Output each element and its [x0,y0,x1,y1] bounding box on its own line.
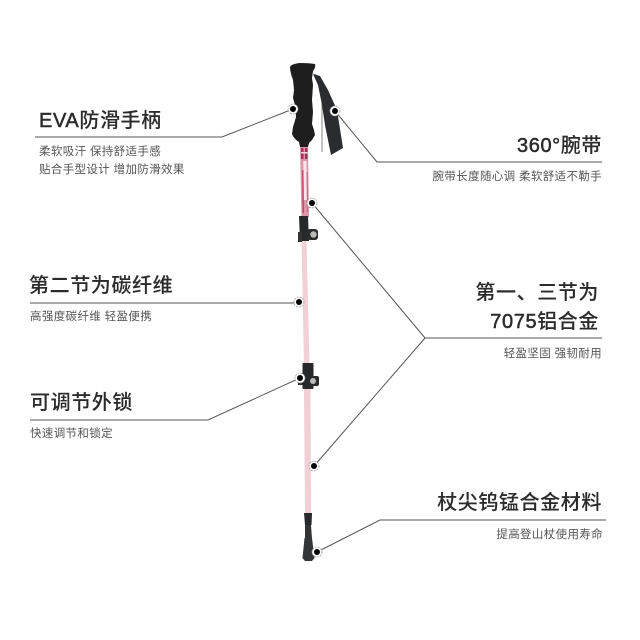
leader line [317,520,606,552]
marker [312,547,322,557]
leader line [35,109,293,137]
description: 轻盈坚固 强韧耐用 [504,346,602,360]
description [39,144,185,176]
marker [288,104,298,114]
description: 柔软吸汗 保持舒适手感 [39,144,161,158]
leader line [30,378,300,420]
description: 高强度碳纤维 轻盈便携 [30,309,152,323]
callout: EVA grip [35,104,298,176]
pole tip [302,513,314,561]
heading: 杖尖钨锰合金材料 [437,491,602,514]
marker lower [309,461,319,471]
heading: EVA防滑手柄 [39,109,162,132]
pole brand graphics [301,148,308,213]
marker [330,106,340,116]
marker [295,373,305,383]
trekking pole [290,63,343,561]
heading: 第二节为碳纤维 [29,274,173,297]
upper clamp [298,216,318,242]
heading: 第一、三节为 [475,281,599,304]
description: 腕带长度随心调 柔软舒适不勒手 [433,169,602,183]
callout: aluminium sections [307,198,602,471]
lower clamp [298,363,319,389]
callout: carbon fibre section [29,274,304,323]
EVA grip [290,63,315,147]
description: 贴合手型设计 增加防滑效果 [39,162,185,176]
description: 快速调节和锁定 [30,426,113,440]
middle pole section [302,240,310,364]
heading: 可调节外锁 [30,391,133,414]
heading [475,281,599,333]
callout: tungsten tip [312,491,606,557]
leader lines [312,203,602,338]
heading: 7075铝合金 [490,310,599,333]
callout: adjustable lock [30,373,305,440]
marker upper [307,198,317,208]
callout: wrist strap [330,106,602,183]
upper pole section [300,146,309,217]
lower pole section [304,388,311,513]
wrist strap [313,74,343,155]
leader line [30,302,299,304]
description: 提高登山杖使用寿命 [496,527,603,541]
leader line [335,111,602,162]
marker [294,297,304,307]
heading: 360°腕带 [517,134,602,157]
